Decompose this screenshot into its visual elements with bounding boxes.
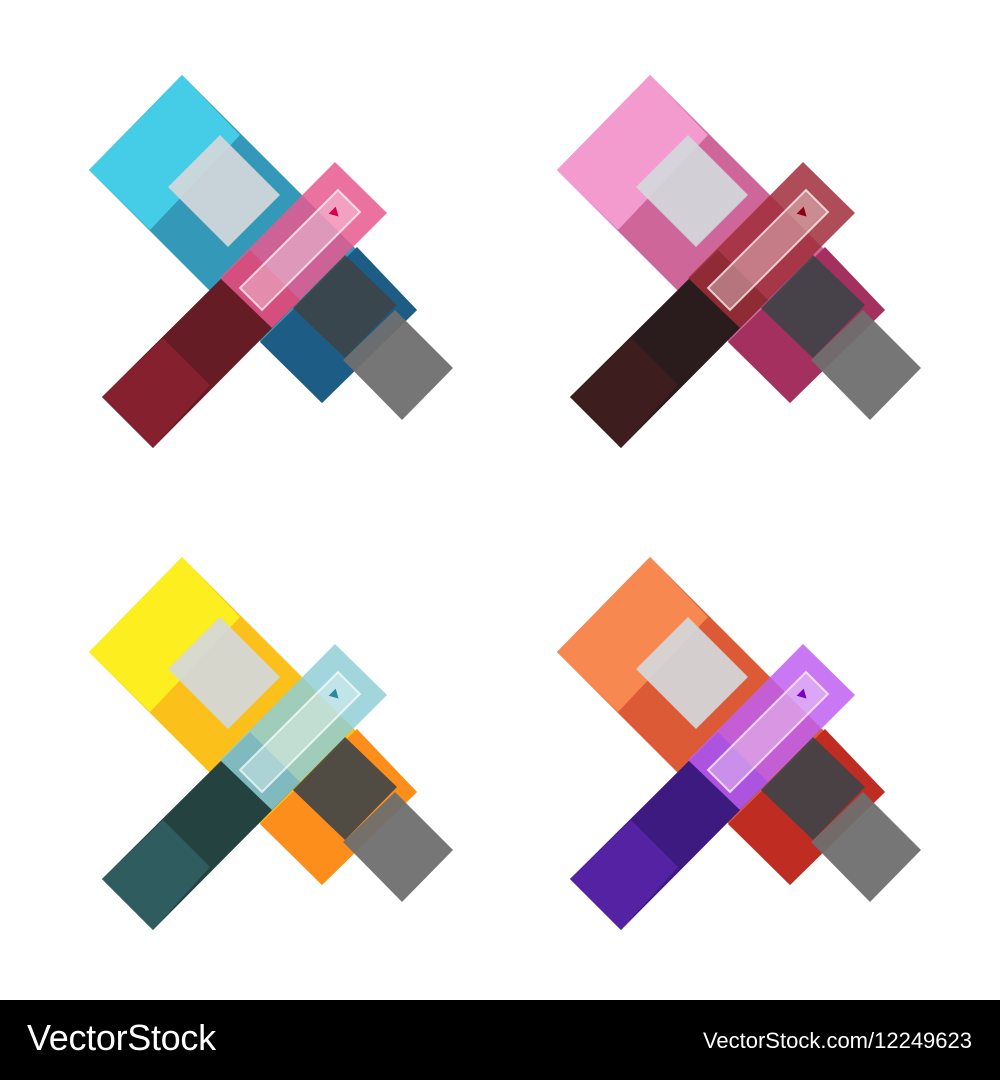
shape: blue/pink <box>89 75 453 448</box>
shape: orange/purple <box>557 557 921 930</box>
footer bar <box>0 1000 1000 1080</box>
url text: VectorStock.com/12249623 <box>703 1028 972 1053</box>
shape: yellow/teal <box>89 557 453 930</box>
shape: pink/dark red <box>557 75 921 448</box>
brand text: VectorStock <box>27 1017 216 1058</box>
